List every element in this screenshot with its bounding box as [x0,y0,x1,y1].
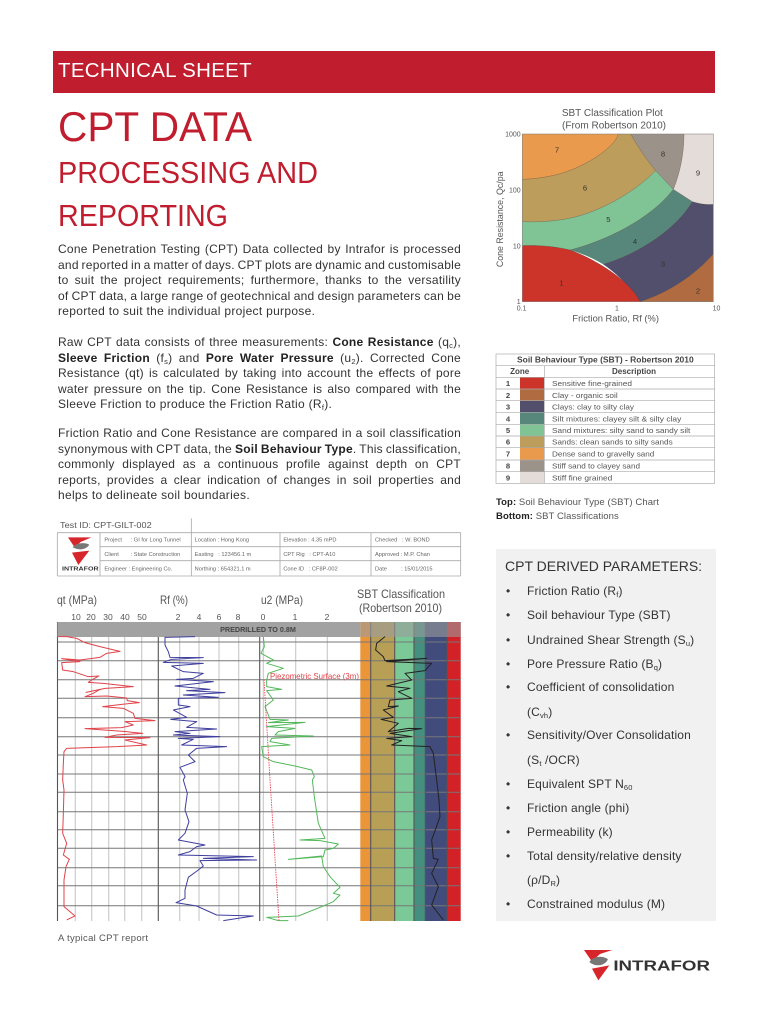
report metadata: Checked : W. BOND [375,538,430,544]
small logo [62,537,99,573]
zone descriptions: Stiff sand to clayey sand [552,462,640,471]
zone descriptions: Clay - organic soil [552,391,618,400]
zone boundaries [522,134,713,302]
report metadata: Approved : M.P. Chan [375,552,430,558]
axis labels: 1000 [505,132,521,139]
report metadata: Easting : 123456.1 m [195,552,252,558]
text block: introduction: and reported in a matter of days. CPT plots are dynamic and customisable [58,258,461,272]
title: PROCESSING AND [58,155,318,190]
zone descriptions: Sands: clean sands to silty sands [552,438,673,447]
zone numbers: 8 [661,150,665,159]
caption: SBT chart and table: Bottom: SBT Classifications [496,511,619,522]
chart title: (From Robertson 2010) [562,120,666,131]
table headings [510,355,694,376]
table headings: Soil Behaviour Type (SBT) - Robertson 2010 [517,355,694,364]
zone numbers: 8 [506,462,511,471]
report metadata: Elevation : 4.35 mPD [283,538,336,544]
chart: SBT classification plot [495,108,721,324]
parameter list: Sensitivity/Over Consolidation [527,728,691,742]
parameter list: Constrained modulus (M) [527,897,665,911]
report metadata: Cone ID : CF8P-002 [283,567,338,573]
axis tick labels: 50 [137,612,147,622]
zone 4 [570,189,692,264]
SBT trace [376,637,443,920]
caption: SBT chart and table [496,497,659,522]
zone numbers: 4 [506,414,511,423]
text block: raw measurements: Resistance (qt) is calculated by taking into account the effects of pore [58,366,461,380]
text block: soil behaviour type: commonly displayed as a continuous profile against depth on CPT [58,457,461,471]
parameter list: Friction Ratio (Rf) [527,584,623,599]
parameter list: • [506,801,510,815]
axis labels: 1 [615,306,619,313]
report metadata: Client [104,552,119,558]
table headings: Description [612,367,656,376]
zone descriptions: Clays: clay to silty clay [552,403,634,412]
axis labels [505,132,721,313]
logo wordmark: INTRAFOR [613,958,711,974]
header bar: technical sheet [53,51,715,93]
logo mark [584,950,612,980]
chart: CPT log [56,587,461,922]
parameter list: • [506,657,510,671]
zone 1 [522,245,640,302]
column headings: Rf (%) [160,593,188,607]
axis tick labels: 0 [261,612,266,622]
zone descriptions: Dense sand to gravelly sand [552,450,654,459]
axis tick labels: 8 [236,612,241,622]
parameter list: • [506,584,510,598]
axis labels: 100 [509,188,521,195]
column headings: u2 (MPa) [261,593,303,607]
zone 2 [640,254,713,302]
parameter list: Friction angle (phi) [527,801,629,815]
zone numbers: 7 [555,146,559,155]
zone numbers [506,379,511,482]
text block: soil behaviour type: Friction Ratio and Cone Resistance are compared in a soil classification [58,426,461,440]
axis tick labels: 4 [197,612,202,622]
report metadata: Location : Hong Kong [195,538,249,544]
parameter list: Pore Pressure Ratio (Bq) [527,657,662,672]
report metadata: Engineer : Engineering Co. [104,567,173,573]
zone numbers: 2 [506,391,510,400]
parameter list: (ρ/DR) [527,873,560,888]
axis tick labels: 30 [103,612,113,622]
axis labels: 10 [513,244,521,251]
zone numbers: 6 [583,184,587,193]
axis labels: 1 [517,299,521,306]
predrilled band: PREDRILLED TO 0.8M [220,625,296,634]
report metadata: Northing : 654321.1 m [195,567,251,573]
SBT columns [360,622,461,921]
zone 9 [673,134,713,205]
zone numbers: 3 [506,403,510,412]
parameter list: • [506,777,510,791]
parameter list: Total density/relative density [527,849,682,863]
title [58,103,318,233]
Rf trace [163,637,257,921]
axis tick labels: 6 [217,612,222,622]
report metadata: Project [104,538,122,544]
text block: introduction: reported to suit the individual project purpose. [58,304,315,318]
chart title: SBT Classification Plot [562,108,663,119]
column headings: (Robertson 2010) [359,601,442,615]
text block: introduction: Cone Penetration Testing (CPT) Data collected by Intrafor is processed [58,242,461,256]
text block: raw measurements: water pressure on the tip. Cone Resistance is also compared with the [58,382,461,396]
parameter list: • [506,608,510,622]
zone descriptions [552,379,691,482]
report metadata: : GI for Long Tunnel [131,538,181,544]
column headings [57,587,445,615]
zone 6 [522,134,656,222]
zone numbers: 1 [559,278,563,287]
zone numbers [555,146,700,295]
table grid [57,518,461,576]
text block: raw measurements: Raw CPT data consists of three measurements: Cone Resistance (qc), [58,335,461,350]
zone descriptions: Silt mixtures: clayey silt & silty clay [552,414,682,423]
u2 trace [261,637,340,921]
zone descriptions: Sensitive fine-grained [552,379,632,388]
log grid [58,622,461,921]
predrilled band [58,622,461,637]
zone 5 [522,171,673,250]
zone numbers: 9 [696,168,700,177]
parameter list: • [506,633,510,647]
parameter list: Permeability (k) [527,825,613,839]
zone numbers: 6 [506,438,510,447]
qt trace [58,637,155,920]
zone descriptions: Stiff fine grained [552,473,612,482]
zone numbers: 2 [696,286,700,295]
report metadata: Date : 15/01/2015 [375,567,433,573]
parameter list: • [506,849,510,863]
text block: soil behaviour type: synonymous with CPT data, the Soil Behaviour Type. This classification, [58,442,461,456]
title: CPT DATA [58,103,252,150]
table: SBT zones [496,354,715,484]
zone 3 [603,202,713,302]
text block: soil behaviour type: helps to delineate soil boundaries. [58,488,250,502]
caption: SBT chart and table: Top: Soil Behaviour Type (SBT) Chart [496,497,659,508]
parameter list: Soil behaviour Type (SBT) [527,608,671,622]
axis tick labels: 40 [120,612,130,622]
parameter list: • [506,728,510,742]
column headings: qt (MPa) [57,593,97,607]
x axis title: Friction Ratio, Rf (%) [572,314,659,324]
text block: soil behaviour type [58,426,461,502]
parameter list: (Cvh) [527,705,552,720]
axis tick labels: 2 [325,612,330,622]
text block: raw measurements [58,335,461,412]
title: REPORTING [58,198,228,233]
y axis title: Cone Resistance, Qc/pa [495,171,505,267]
zone numbers: 5 [506,426,511,435]
table grid [496,354,715,483]
zone numbers: 9 [506,473,510,482]
parameter list: (St /OCR) [527,753,580,768]
report metadata [104,538,433,573]
report metadata: CPT Rig : CPT-A10 [283,552,335,558]
text block: introduction: of CPT data, a large range of geotechnical and design parameters can be [58,289,461,303]
text block: raw measurements: Sleeve Friction (fs) and Pore Water Pressure (u2). Corrected Cone [58,351,461,366]
axis labels: 10 [713,306,721,313]
zone numbers: 7 [506,450,510,459]
zone numbers: 4 [633,237,638,246]
zone numbers: 5 [606,215,610,224]
parameter list: • [506,680,510,694]
report metadata: : State Construction [131,552,180,558]
small logo: INTRAFOR [62,567,99,573]
parameter list: Undrained Shear Strength (Su) [527,633,694,648]
parameter list: Equivalent SPT N60 [527,777,633,792]
axis tick labels: 1 [293,612,298,622]
zone numbers: 3 [661,260,665,269]
header bar: technical sheet: TECHNICAL SHEET [58,59,252,82]
zone descriptions: Sand mixtures: silty sand to sandy silt [552,426,691,435]
axis tick labels: 10 [71,612,81,622]
chart title [562,108,666,131]
axis tick labels: 20 [86,612,96,622]
piezometric surface line: Piezometric Surface (3m) [270,671,359,681]
zone 8 [631,134,684,189]
zone numbers: 1 [506,379,511,388]
panel heading: CPT DERIVED PARAMETERS: [505,558,702,574]
text block: soil behaviour type: reports, provides a clear indication of changes in soil properties and [58,473,461,487]
axis tick labels [71,612,330,622]
swatches [520,377,544,483]
parameter list: • [506,897,510,911]
table headings: Zone [510,367,530,376]
caption: typical report: A typical CPT report [58,933,148,944]
column headings: SBT Classification [357,587,445,601]
logo: Intrafor [584,950,711,980]
parameter list: Coefficient of consolidation [527,680,674,694]
panel: CPT derived parameters [496,549,716,921]
zone 7 [522,134,618,179]
text block: raw measurements: Sleeve Friction to produce the Friction Ratio (Rf). [58,397,332,412]
parameter list: • [506,825,510,839]
test id: Test ID: CPT-GILT-002 [60,521,152,530]
text block: introduction [58,242,461,318]
plot frame [522,134,713,302]
axis tick labels: 2 [176,612,181,622]
report header table [56,518,462,576]
axis labels: 0.1 [517,306,527,313]
text block: introduction: to suit the project requirements; furthermore, thanks to the versatility [58,273,461,287]
piezometric surface line [264,671,359,921]
parameter list [506,584,694,911]
